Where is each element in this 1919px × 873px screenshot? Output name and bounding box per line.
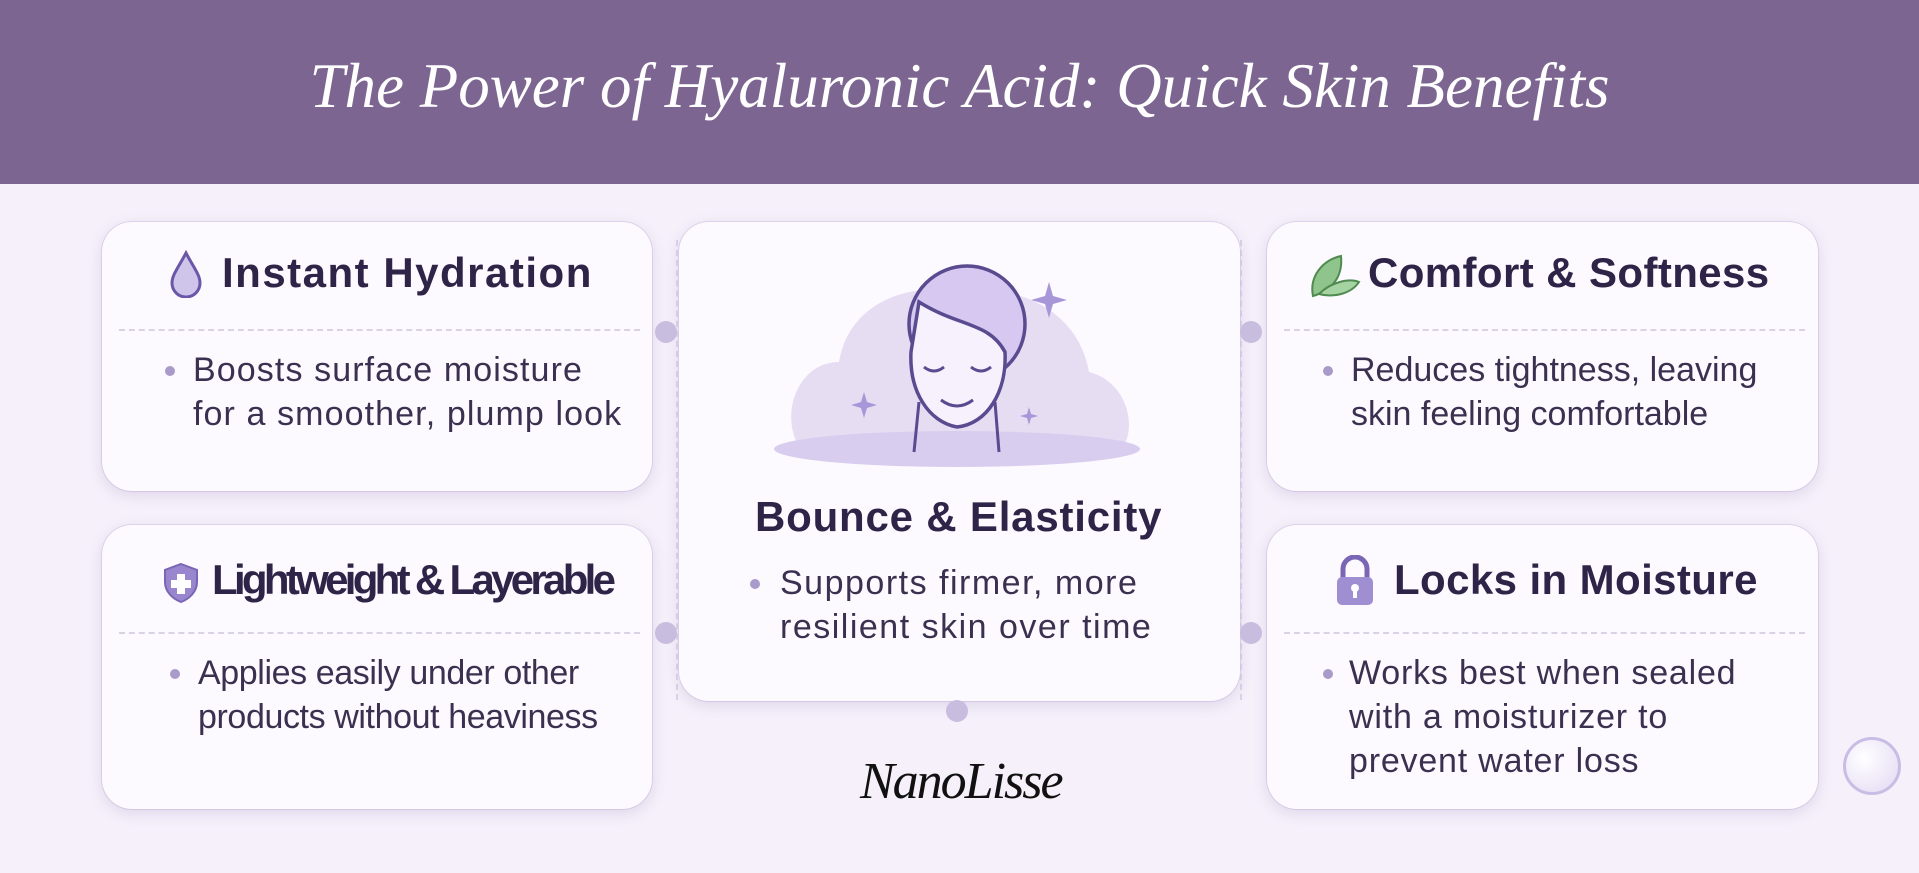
connector lines [676, 240, 678, 700]
text: Boosts surface moisture [193, 351, 583, 389]
icon: lock [1337, 555, 1373, 605]
icon: shield [164, 562, 198, 603]
panel: locks in moisture [1267, 525, 1818, 809]
header bar [0, 0, 1919, 184]
text: Works best when sealed [1349, 654, 1736, 692]
text [198, 654, 598, 736]
icon: water drop [170, 250, 202, 298]
text: prevent water loss [1349, 742, 1639, 780]
logo: NanoLisse [860, 753, 1062, 810]
text: resilient skin over time [780, 608, 1152, 646]
heading: Lightweight & Layerable [212, 556, 612, 603]
panel: comfort [1267, 222, 1818, 491]
panel: instant hydration [102, 222, 652, 491]
text: Reduces tightness, leaving [1351, 351, 1757, 389]
text: skin feeling comfortable [1351, 395, 1708, 433]
heading: Locks in Moisture [1394, 556, 1758, 603]
text: for a smoother, plump look [193, 395, 622, 433]
title: The Power of Hyaluronic Acid: Quick Skin Benefits [310, 51, 1609, 121]
text: Supports firmer, more [780, 564, 1138, 602]
text [1351, 351, 1757, 433]
text: products without heaviness [198, 698, 598, 736]
text [780, 564, 1152, 646]
text: Applies easily under other [198, 654, 579, 692]
heading: Comfort & Softness [1368, 249, 1770, 296]
text [193, 351, 622, 433]
text: with a moisturizer to [1349, 698, 1668, 736]
panel: bounce & elasticity [679, 222, 1240, 701]
icon: leaves [1311, 254, 1360, 298]
icon: face illustration [774, 264, 1140, 467]
heading: Bounce & Elasticity [755, 493, 1162, 540]
panel: lightweight [102, 525, 652, 809]
heading: Instant Hydration [222, 249, 593, 296]
icon: water bubble [1843, 737, 1901, 795]
text [1349, 654, 1736, 780]
connector dots [655, 321, 1262, 722]
